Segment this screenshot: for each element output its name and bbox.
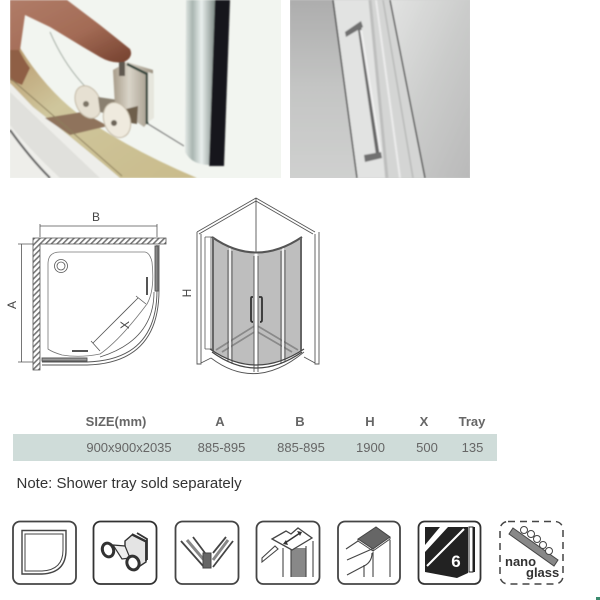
icon: shower tray (13, 522, 76, 584)
icon: seal profile (176, 522, 238, 584)
table headings: Tray (459, 414, 486, 429)
table band (13, 434, 497, 461)
icon: nano glass: glass (526, 565, 559, 580)
diagram: floor plan with dimensions A, B, X (5, 210, 166, 370)
table headings: X (420, 414, 429, 429)
height marker (205, 237, 212, 349)
table headings: SIZE(mm) (86, 414, 146, 429)
tinted glass panels (212, 238, 302, 365)
dimension X (91, 296, 146, 351)
drain (54, 260, 68, 272)
dimension A (5, 244, 33, 362)
table values: 885-895 (198, 440, 245, 455)
icon: nano glass (500, 522, 563, 584)
photo: door handle on grey glass (290, 0, 470, 178)
dimension A: A (5, 301, 19, 309)
table values: 885-895 (277, 440, 325, 455)
icon: roller (94, 522, 156, 584)
back walls (197, 198, 315, 252)
table values: 1900 (356, 440, 385, 455)
diagram: 3D enclosure view with height H: H (180, 289, 194, 297)
dimension B: B (92, 210, 100, 224)
icon: top bracket (338, 522, 400, 584)
table values (86, 440, 483, 455)
table values: 500 (416, 440, 438, 455)
icon: 6mm glass: 6 (451, 552, 461, 571)
tray base (210, 349, 304, 368)
icon: 6mm glass (418, 522, 480, 584)
handles (251, 297, 262, 322)
size table (13, 414, 497, 461)
dimension X: X (118, 321, 132, 329)
door frame and profiles (212, 237, 302, 252)
note: Note: Shower tray sold separately (16, 475, 242, 492)
curved glass doors (42, 245, 159, 365)
table headings: H (365, 414, 375, 429)
table values: 135 (462, 440, 483, 455)
corner marker (596, 597, 600, 600)
photo: sliding door roller being pressed by a finger (10, 0, 283, 178)
table headings: A (215, 414, 225, 429)
diagram: 3D enclosure view with height H (180, 198, 319, 374)
shower tray outline (48, 252, 153, 356)
dimension B (40, 210, 157, 237)
icon: adjustable wall profile (256, 522, 320, 584)
table headings: B (295, 414, 305, 429)
table headings (86, 414, 486, 429)
hatched walls (33, 238, 166, 370)
icon: nano glass: nano (505, 554, 536, 569)
table values: 900x900x2035 (86, 440, 172, 455)
